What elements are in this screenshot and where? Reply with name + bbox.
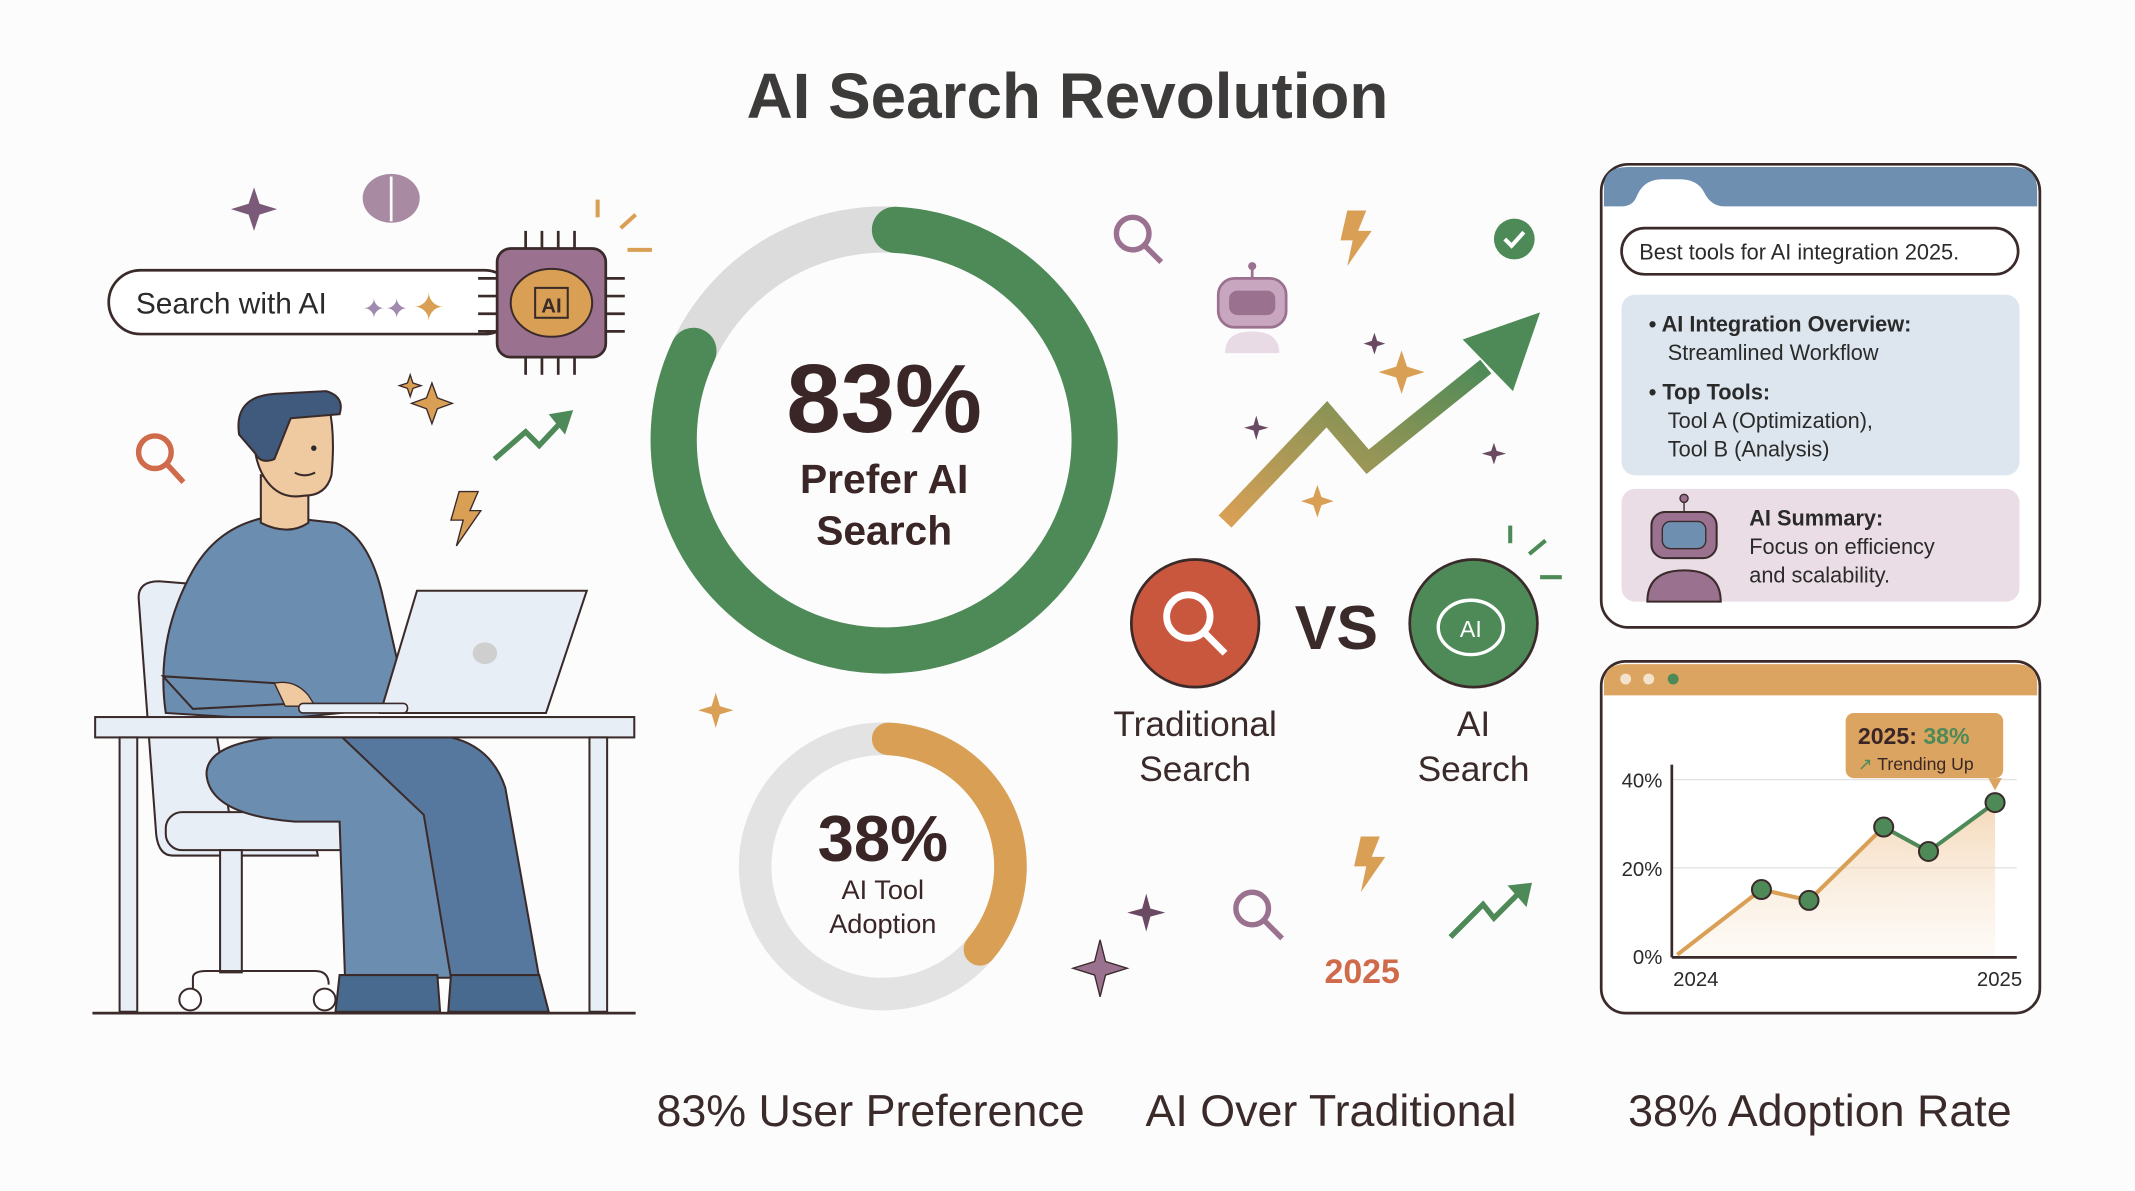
panel: AI integration — [1601, 164, 2040, 627]
comparison: traditional vs AI: AI — [1457, 705, 1490, 744]
panel: line chart — [1601, 661, 2040, 1013]
comparison: traditional vs AI: VS — [1295, 593, 1378, 663]
panel: line chart: 0% — [1633, 947, 1662, 969]
search bar: ✦ — [413, 287, 445, 329]
search bar: ✦✦ — [363, 293, 408, 324]
chart: 83% donut — [674, 230, 1095, 651]
chart: 83% donut: Search — [816, 508, 952, 554]
desk — [95, 717, 634, 737]
info box: • AI Integration Overview: — [1649, 311, 1911, 336]
panel: AI integration: Best tools for AI integration 2025. — [1639, 239, 1959, 264]
callout: ↗ Trending Up — [1858, 754, 1974, 774]
caption: comparison: AI Over Traditional — [1145, 1086, 1516, 1136]
panel: line chart: 2024 — [1673, 969, 1718, 991]
icon: traditional search — [1131, 560, 1259, 687]
search bar: Search with AI — [136, 288, 327, 321]
icon: robot — [1218, 262, 1286, 353]
icon: AI brain — [1410, 526, 1562, 687]
panel: line chart: 2025 — [1977, 969, 2022, 991]
icon: sparkle — [698, 693, 733, 728]
icon: magnifier — [139, 436, 183, 482]
summary box: and scalability. — [1749, 563, 1890, 588]
chart: 38% donut: 38% — [818, 802, 948, 875]
info box: Streamlined Workflow — [1668, 340, 1879, 365]
icon: sparkle — [231, 187, 277, 231]
icon: trend arrow — [494, 410, 573, 459]
info box: Tool B (Analysis) — [1668, 436, 1830, 461]
summary box: AI Summary: — [1749, 506, 1883, 531]
chart: 38% donut — [755, 739, 1010, 994]
callout — [1846, 713, 2003, 790]
chart: 38% donut: Adoption — [829, 908, 936, 939]
comparison: traditional vs AI: Search — [1139, 750, 1251, 789]
arrow: trend up — [1225, 312, 1540, 521]
icon: sparkles — [399, 375, 452, 424]
info box — [1622, 295, 2019, 475]
summary box: Focus on efficiency — [1749, 534, 1935, 559]
info box: • Top Tools: — [1649, 379, 1770, 404]
icons cluster bottom: 2025 — [1324, 953, 1400, 991]
search bar — [109, 270, 516, 334]
info box: Tool A (Optimization), — [1668, 408, 1873, 433]
icon: brain — [363, 174, 420, 223]
chart: 83% donut: 83% — [786, 343, 982, 453]
chart: 38% donut: AI Tool — [842, 874, 924, 905]
comparison: traditional vs AI: Search — [1418, 750, 1529, 789]
caption: preference: 83% User Preference — [656, 1086, 1085, 1136]
torso — [163, 516, 407, 720]
legs — [207, 737, 451, 978]
comparison: traditional vs AI: Traditional — [1113, 705, 1277, 744]
icons cluster bottom — [1073, 837, 1532, 997]
chart: 83% donut: Prefer AI — [800, 456, 968, 502]
callout: 2025: 38% — [1858, 723, 1970, 749]
title: AI Search Revolution — [747, 60, 1388, 132]
laptop — [380, 591, 587, 713]
comparison: traditional vs AI — [1113, 526, 1562, 789]
caption: adoption: 38% Adoption Rate — [1628, 1086, 2012, 1136]
panel: line chart: 40% — [1622, 771, 1662, 793]
icons cluster top — [1116, 210, 1540, 521]
chair — [139, 581, 318, 856]
illustration: person at laptop — [92, 174, 652, 1013]
icon: AI chip: AI — [541, 295, 562, 317]
icon: AI chip — [478, 200, 652, 375]
panel: line chart: 20% — [1622, 859, 1662, 881]
icon: AI brain: AI — [1460, 616, 1482, 642]
icon: lightning — [451, 492, 481, 546]
summary box — [1622, 489, 2019, 602]
head — [261, 475, 308, 530]
